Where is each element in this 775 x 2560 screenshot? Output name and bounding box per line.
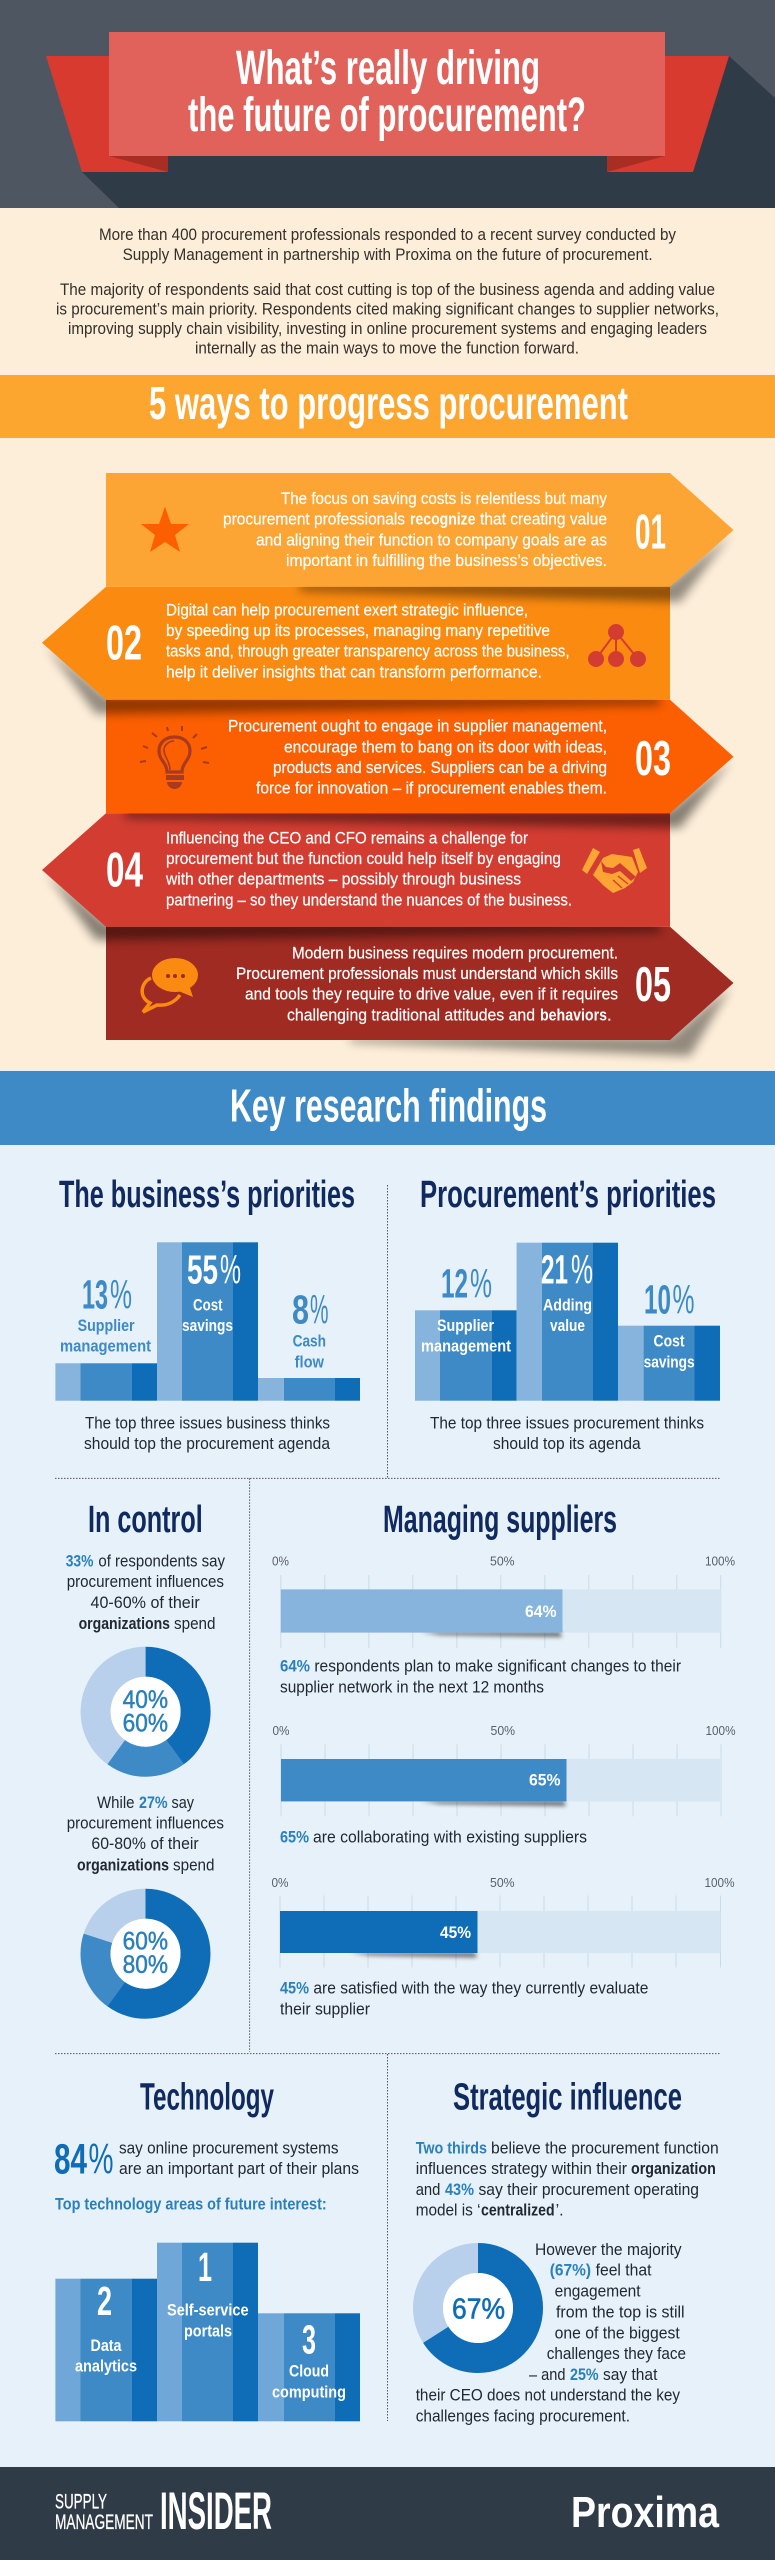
text: two thirds: centralized <box>481 2202 555 2220</box>
bar chart: business: Supplier <box>78 1317 135 1335</box>
bar chart: business: Cash <box>293 1332 326 1350</box>
step 04 text: partnering – so they understand the nuances of the business. <box>166 891 572 909</box>
logo: Supply Management Insider <box>55 2482 272 2541</box>
text: 64%: 64% <box>280 1658 310 1676</box>
bar chart: 65%: 50% <box>490 1723 516 1738</box>
text: two thirds <box>416 2139 719 2220</box>
text: 64%: supplier network in the next 12 months <box>280 1678 544 1696</box>
bar chart: business: 13 <box>82 1271 108 1317</box>
text: 45%: their supplier <box>280 2001 370 2019</box>
text: two thirds: ’. <box>556 2202 564 2220</box>
bar chart: procurement: 21 <box>541 1246 568 1292</box>
stat: 84%: are an important part of their plans <box>119 2160 359 2178</box>
caption <box>84 1414 331 1453</box>
bar chart: procurement: Supplier <box>437 1317 494 1335</box>
text: 27%: While <box>97 1794 134 1812</box>
donut chart: 60-80%: 60% <box>123 1928 168 1956</box>
panel: managing suppliers <box>272 1499 736 2019</box>
bar chart: 64% <box>272 1554 735 1648</box>
text: majority: from the top is still <box>556 2303 685 2321</box>
step 01 text: that creating value <box>480 511 607 529</box>
step 03 text: Procurement ought to engage in supplier management, <box>228 718 607 736</box>
bar chart: procurement: % <box>470 1260 492 1306</box>
text: majority: 25% <box>570 2366 599 2384</box>
stat: 84% <box>54 2135 359 2183</box>
footer <box>0 2467 775 2560</box>
donut chart: 67%: 67% <box>452 2293 505 2325</box>
bar chart: 64%: 100% <box>705 1554 735 1569</box>
bar chart: 45%: 100% <box>704 1875 735 1890</box>
bar chart: business: savings <box>182 1317 233 1335</box>
text: two thirds: believe the procurement function <box>491 2139 719 2157</box>
text: 27%: say <box>172 1794 195 1812</box>
text: two thirds: 43% <box>445 2181 474 2199</box>
text: majority: their CEO does not understand the key <box>416 2387 681 2405</box>
text: 33%: organizations <box>79 1615 170 1633</box>
step 02 text: Digital can help procurement exert strategic influence, <box>166 601 528 619</box>
icon: network <box>588 624 646 667</box>
text: 33%: spend <box>174 1615 216 1633</box>
step 02 text: help it deliver insights that can transform performance. <box>166 663 542 681</box>
step 04 <box>42 813 670 940</box>
donut chart: 67% <box>428 2258 528 2358</box>
icon: handshake <box>582 848 647 893</box>
step 01 text: procurement professionals <box>223 511 405 529</box>
step 01 text: and aligning their function to company goals are as <box>256 531 607 549</box>
intro text: Supply Management in partnership with Proxima on the future of procurement. <box>123 246 653 264</box>
text: majority: However the majority <box>535 2241 682 2259</box>
text: 65%: 65% <box>280 1828 309 1846</box>
bar chart: business: flow <box>295 1353 324 1371</box>
text: 33%: of respondents say <box>98 1552 226 1570</box>
caption: The top three issues business thinks <box>85 1414 330 1432</box>
step 05 text: behaviors <box>540 1006 607 1024</box>
bar chart: 45%: 45% <box>440 1924 471 1942</box>
bar chart: procurement: % <box>571 1246 593 1292</box>
bar chart: technology: analytics <box>75 2358 137 2376</box>
text: two thirds: organization <box>631 2160 716 2178</box>
donut chart: 40-60%: 40% <box>123 1686 168 1714</box>
panel: business priorities <box>55 1174 360 1453</box>
donut chart: 60-80%: 80% <box>123 1951 168 1979</box>
bar chart: technology: 3 <box>302 2316 316 2362</box>
step 03 text: products and services. Suppliers can be a driving <box>273 759 607 777</box>
intro panel <box>0 208 775 1070</box>
step 02 text: tasks and, through greater transparency across the business, <box>166 643 570 661</box>
donut chart: 60-80% <box>96 1904 196 2004</box>
text: 45% <box>280 1980 648 2019</box>
step 01 text: important in fulfilling the business’s objectives. <box>286 552 607 570</box>
text: two thirds: say their procurement operating <box>478 2181 699 2199</box>
bar chart: business: 55 <box>187 1246 218 1292</box>
step 03 <box>106 700 734 828</box>
bar chart: technology: 1 <box>198 2244 212 2290</box>
bar chart: technology: Data <box>90 2337 122 2355</box>
text: 33%: procurement influences <box>67 1573 224 1591</box>
text: two thirds: model is ‘ <box>416 2202 480 2220</box>
step 02 text: by speeding up its processes, managing many repetitive <box>166 622 550 640</box>
bar chart: 45%: 50% <box>490 1875 515 1890</box>
text: majority: feel that <box>596 2262 652 2280</box>
caption: should top its agenda <box>493 1435 641 1453</box>
bar chart: business: 8 <box>292 1286 309 1332</box>
bar chart: technology: computing <box>272 2384 346 2402</box>
text: 27%: organizations <box>77 1856 169 1874</box>
step 05 text: . <box>607 1006 612 1024</box>
step 04 text: with other departments – possibly through business <box>165 871 521 889</box>
step 03 text: encourage them to bang on its door with ideas, <box>284 738 607 756</box>
bar chart: technology <box>55 2243 360 2421</box>
bar chart: business <box>55 1242 360 1401</box>
step 03 number: 03 <box>635 732 671 786</box>
bar chart: business: % <box>220 1246 241 1292</box>
step 05 text: and tools they require to drive value, even if it requires <box>245 986 618 1004</box>
bar chart: 65%: 100% <box>706 1723 736 1738</box>
text: majority: – and <box>529 2366 566 2384</box>
step 01 text: recognize <box>410 511 476 529</box>
text: 45%: are satisfied with the way they currently evaluate <box>313 1980 648 1998</box>
bar chart: 45% <box>272 1875 735 1968</box>
bar chart: procurement <box>415 1243 720 1401</box>
step 05 <box>106 927 734 1056</box>
heading: Technology <box>140 2076 274 2118</box>
bar chart: 64%: 0% <box>272 1554 289 1569</box>
stat: 84%: % <box>88 2135 114 2183</box>
bar chart: procurement: savings <box>644 1353 695 1371</box>
panel: procurement priorities <box>415 1174 720 1453</box>
text: 33%: 33% <box>66 1552 94 1570</box>
text: majority: challenges they face <box>547 2345 686 2363</box>
intro text: improving supply chain visibility, investing in online procurement systems and engaging leaders <box>68 320 707 338</box>
bar chart: business: Cost <box>193 1297 223 1315</box>
caption: The top three issues procurement thinks <box>430 1414 704 1432</box>
text: majority <box>416 2241 686 2425</box>
bar chart: business: % <box>310 1286 328 1332</box>
logo: Supply Management Insider: MANAGEMENT <box>55 2511 153 2534</box>
text: majority: engagement <box>555 2283 641 2301</box>
bar chart: 64%: 64% <box>525 1603 557 1621</box>
panel: strategic influence <box>416 2076 719 2425</box>
stat: 84%: 84 <box>54 2135 87 2183</box>
text: two thirds: Two thirds <box>416 2139 487 2157</box>
step 05 text: challenging traditional attitudes and <box>287 1006 535 1024</box>
logo: Supply Management Insider: INSIDER <box>160 2482 272 2541</box>
bar chart: 65% <box>272 1723 736 1816</box>
heading: In control <box>88 1499 203 1541</box>
text: 45%: 45% <box>280 1980 309 1998</box>
bar chart: procurement: 10 <box>644 1276 671 1322</box>
step 04 text: procurement but the function could help itself by engaging <box>166 850 561 868</box>
bar chart: procurement: 12 <box>441 1260 468 1306</box>
donut chart: 40-60% <box>96 1662 196 1762</box>
bar chart: technology: Cloud <box>289 2363 329 2381</box>
blue heading banner: Key research findings <box>230 1080 547 1132</box>
text: 27% <box>67 1794 224 1874</box>
intro text: More than 400 procurement professionals responded to a recent survey conducted by <box>99 226 677 244</box>
bar chart: 65%: 65% <box>529 1772 561 1790</box>
step 05 number: 05 <box>635 958 671 1012</box>
logo: Supply Management Insider: SUPPLY <box>55 2490 107 2513</box>
text: two thirds: influences strategy within their <box>416 2160 627 2178</box>
step 05 text: Procurement professionals must understand which skills <box>236 965 618 983</box>
step 01 text: The focus on saving costs is relentless but many <box>281 490 608 508</box>
orange heading banner <box>0 375 775 438</box>
step 04 text: Influencing the CEO and CFO remains a challenge for <box>166 829 528 847</box>
bar chart: business: % <box>110 1271 132 1317</box>
text: 27%: procurement influences <box>67 1815 224 1833</box>
text: majority: one of the biggest <box>555 2324 680 2342</box>
step 01 text <box>223 490 608 570</box>
text: majority: say that <box>603 2366 658 2384</box>
icon: light bulb <box>140 726 209 789</box>
ribbon banner <box>46 32 729 172</box>
bar chart: procurement: management <box>421 1338 511 1356</box>
text: 33%: 40-60% of their <box>90 1594 200 1612</box>
subheading: Top technology areas of future interest: <box>55 2195 327 2213</box>
step 05 text <box>236 944 618 1024</box>
step 05 text: Modern business requires modern procurement. <box>292 944 618 962</box>
step 03 text <box>228 718 607 798</box>
step 04 text <box>165 829 572 909</box>
icon: star <box>141 507 189 552</box>
bar chart: procurement: value <box>550 1317 585 1335</box>
bar chart: technology: 2 <box>97 2278 112 2324</box>
step 02 <box>42 587 670 714</box>
caption: should top the procurement agenda <box>84 1435 331 1453</box>
heading: Managing suppliers <box>383 1499 617 1541</box>
text: 65%: are collaborating with existing suppliers <box>313 1828 587 1846</box>
text: 27%: spend <box>173 1856 214 1874</box>
bar chart: business: management <box>60 1338 151 1356</box>
bar chart: procurement: Cost <box>654 1332 685 1350</box>
step 02 text <box>166 601 570 681</box>
intro text: The majority of respondents said that cost cutting is top of the business agenda and adding value <box>60 281 715 299</box>
bar chart: procurement: % <box>672 1276 694 1322</box>
text: 27%: 27% <box>139 1794 168 1812</box>
caption <box>430 1414 704 1453</box>
intro text <box>56 226 719 358</box>
text: 64%: respondents plan to make significant changes to their <box>314 1658 681 1676</box>
bar chart: 65%: 0% <box>272 1723 290 1738</box>
donut chart: 40-60%: 60% <box>123 1709 168 1737</box>
bar chart: 45%: 0% <box>272 1875 289 1890</box>
step 04 number: 04 <box>106 844 143 898</box>
text: majority: (67%) <box>550 2262 591 2280</box>
stat: 84%: say online procurement systems <box>119 2139 339 2157</box>
panel: technology <box>54 2076 360 2421</box>
icon: chat bubbles <box>142 958 198 1012</box>
title <box>188 42 586 142</box>
step 02 number: 02 <box>106 616 142 670</box>
bar chart: technology: portals <box>184 2323 232 2341</box>
step 03 text: force for innovation – if procurement enables them. <box>256 780 607 798</box>
intro text: is procurement’s main priority. Respondents cited making significant changes to supplier networks, <box>56 301 719 319</box>
step 01 <box>106 473 734 602</box>
bar chart: 64%: 50% <box>490 1554 515 1569</box>
text: majority: challenges facing procurement. <box>416 2407 630 2425</box>
panel: in control <box>66 1499 226 2004</box>
text: 27%: 60-80% of their <box>91 1835 199 1853</box>
bar chart: technology: Self-service <box>167 2302 249 2320</box>
header panel <box>0 0 775 208</box>
text: 64% <box>280 1658 681 1696</box>
blue heading banner <box>0 1071 775 1145</box>
step 01 number: 01 <box>635 505 666 559</box>
text: 33% <box>66 1552 226 1633</box>
intro text: internally as the main ways to move the function forward. <box>195 340 579 358</box>
bar chart: procurement: Adding <box>543 1297 592 1315</box>
title: What’s really driving <box>236 42 540 95</box>
text: two thirds: and <box>416 2181 440 2199</box>
logo: Proxima: Proxima <box>571 2488 719 2537</box>
heading: The business’s priorities <box>59 1174 355 1216</box>
